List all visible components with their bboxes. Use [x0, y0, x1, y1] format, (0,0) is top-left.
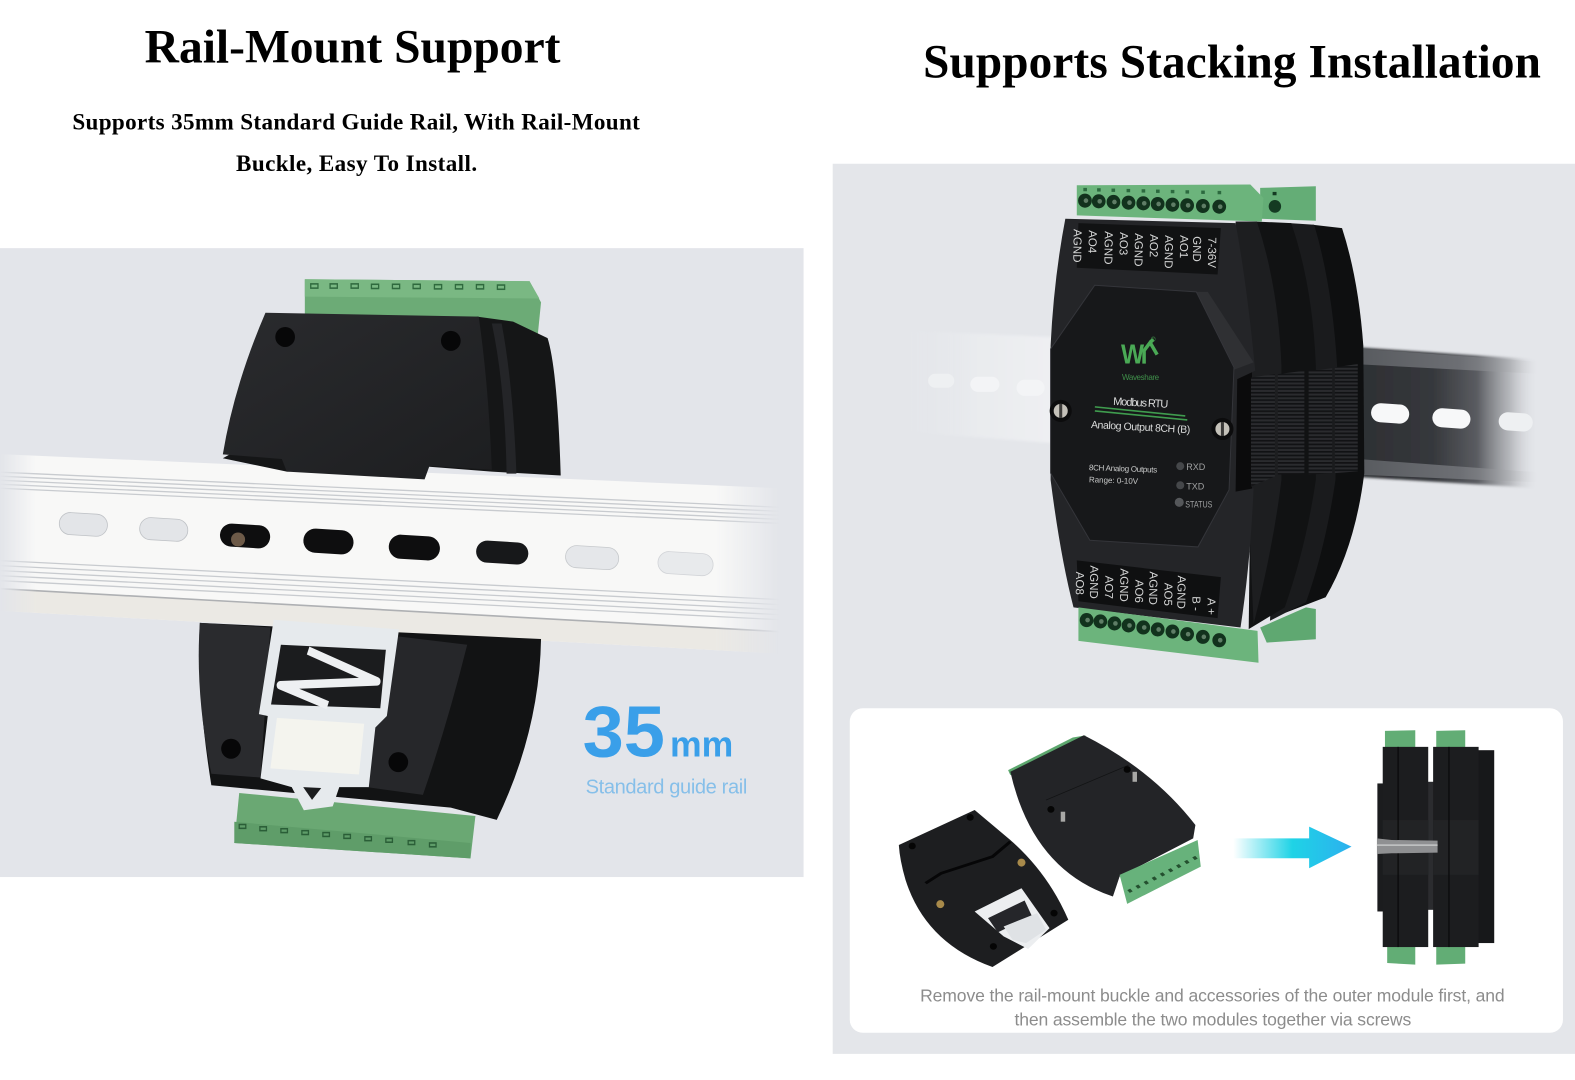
bottom pin labels: AGND — [1117, 568, 1130, 602]
product name and arrows: Analog Output 8CH (B) — [1091, 419, 1191, 436]
top pin labels — [1070, 229, 1217, 269]
title: Rail-Mount Support: Rail-Mount Support — [145, 21, 561, 73]
spec text — [1089, 463, 1157, 486]
module: lower half with rail clip — [199, 620, 541, 858]
status LEDs: STATUS — [1185, 499, 1212, 509]
bevel — [1196, 292, 1254, 370]
title: Supports Stacking Installation: Supports Stacking Installation — [923, 36, 1541, 88]
callout: 35mm standard guide rail: 35 — [583, 692, 665, 773]
top pin labels: AGND — [1131, 233, 1144, 267]
bottom pin labels: AO5 — [1161, 583, 1174, 606]
top label recess — [1077, 223, 1221, 274]
bottom pin labels: AO7 — [1102, 576, 1114, 599]
arrow: assembly direction — [1233, 827, 1352, 868]
stacked modules: body and terminals — [1051, 185, 1364, 663]
description: rail-mount text: Buckle, Easy To Install. — [236, 150, 477, 176]
DIN rail: aluminium strip with slots — [0, 454, 804, 655]
top pin labels: AO2 — [1147, 234, 1159, 257]
description: rail-mount text: Supports 35mm Standard Guide Rail, With Rail-Mount — [72, 109, 640, 135]
top pin labels: AO4 — [1085, 230, 1098, 254]
octagonal label plate — [1051, 285, 1234, 547]
bottom terminal block — [1078, 607, 1259, 663]
module: upper half in front of rail — [223, 279, 561, 479]
logo: Waveshare: W — [1121, 339, 1144, 370]
logo: Waveshare: Waveshare — [1122, 373, 1160, 382]
top pin labels: AGND — [1162, 235, 1174, 269]
status LEDs: TXD — [1186, 481, 1205, 491]
bottom label recess — [1077, 560, 1221, 618]
spec text: 8CH Analog Outputs — [1089, 463, 1157, 475]
top pin labels: 7-36V — [1205, 237, 1217, 268]
panel: stacking installation photo — [833, 164, 1575, 1054]
logo: Waveshare: ® — [1151, 337, 1156, 344]
bottom pin labels: AGND — [1146, 571, 1159, 605]
DIN rail: behind stacked modules — [884, 330, 1539, 488]
left module with clip — [899, 810, 1068, 967]
bottom pin labels: A + — [1204, 598, 1217, 615]
panel background — [833, 164, 1575, 1054]
right module with terminal block — [1008, 735, 1201, 904]
panel background — [0, 248, 804, 877]
top terminal block — [1077, 185, 1263, 221]
callout: 35mm standard guide rail: mm — [670, 723, 733, 765]
card background — [850, 708, 1563, 1033]
rear stacked housings — [1232, 221, 1364, 629]
status LEDs: RXD — [1186, 462, 1206, 472]
product name and arrows — [1091, 396, 1191, 436]
bottom pin labels — [1073, 565, 1217, 615]
callout: 35mm standard guide rail: Standard guide rail — [586, 777, 747, 799]
top pin labels: AO3 — [1117, 232, 1129, 255]
top pin labels: AGND — [1101, 231, 1114, 265]
caption: Remove the rail-mount buckle and accessories of the outer module first, and — [920, 986, 1505, 1006]
module pair: separated — [899, 730, 1494, 967]
caption: then assemble the two modules together via screws — [1015, 1010, 1411, 1030]
caption — [920, 986, 1505, 1030]
top pin labels: AO1 — [1177, 235, 1189, 258]
product name and arrows: Modbus RTU — [1113, 396, 1169, 411]
rear terminal blocks — [1260, 186, 1316, 643]
card: assembly instructions — [850, 708, 1563, 1033]
stacked modules: side view — [1377, 730, 1494, 965]
top pin labels: AGND — [1070, 229, 1083, 263]
description: rail-mount text — [72, 109, 640, 176]
bottom pin labels: B - — [1189, 596, 1202, 611]
bottom pin labels: AO8 — [1073, 572, 1085, 595]
bottom pin labels: AGND — [1087, 565, 1099, 599]
status LEDs — [1175, 462, 1212, 509]
spec text: Range: 0-10V — [1089, 475, 1139, 486]
main housing — [1051, 219, 1255, 627]
panel: rail-mount photo — [0, 248, 804, 877]
screws — [1050, 400, 1233, 440]
callout: 35mm standard guide rail — [583, 692, 747, 799]
top pin labels: GND — [1190, 236, 1202, 262]
bottom pin labels: AGND — [1174, 575, 1187, 609]
logo: Waveshare — [1121, 337, 1160, 382]
bottom pin labels: AO6 — [1132, 580, 1144, 603]
